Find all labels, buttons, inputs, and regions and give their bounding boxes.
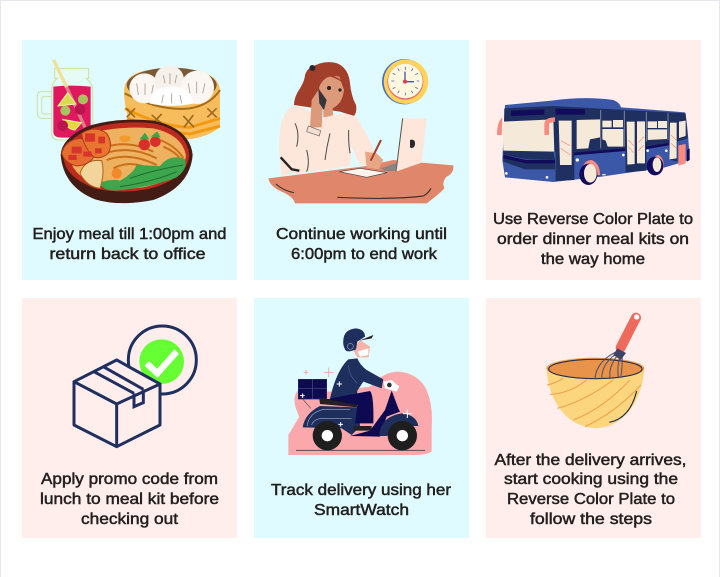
caption: use reverse color plate [493, 211, 693, 268]
caption: start cooking: start cooking using the [504, 471, 678, 488]
caption: continue working: Continue working until [276, 226, 447, 243]
icon: blue bus [497, 98, 690, 185]
panel: apply promo code [22, 298, 237, 538]
icon: masked courier on scooter [288, 328, 432, 455]
caption: track delivery [271, 482, 452, 519]
caption: continue working [276, 226, 447, 263]
caption: continue working: 6:00pm to end work [291, 246, 438, 263]
icon: food with drink, buns and bowl [37, 60, 220, 203]
panel: enjoy meal [22, 40, 237, 280]
panel: start cooking [486, 298, 701, 538]
caption: enjoy meal: return back to office [50, 246, 206, 263]
caption: enjoy meal [32, 226, 226, 263]
caption: apply promo code: checking out [81, 511, 179, 528]
caption: use reverse color plate: order dinner meal kits on [497, 231, 689, 248]
icon: wall clock [382, 59, 428, 104]
panel: reverse color plate on the way home [486, 40, 701, 280]
caption: apply promo code: lunch to meal kit before [40, 491, 219, 508]
caption: start cooking: After the delivery arrives, [494, 452, 686, 469]
caption: start cooking [494, 452, 686, 528]
panel: continue working [254, 40, 469, 280]
icon: mixing bowl with whisk [546, 314, 644, 428]
caption: use reverse color plate: Use Reverse Color Plate to [493, 211, 693, 228]
caption: use reverse color plate: the way home [541, 251, 645, 268]
caption: track delivery: SmartWatch [314, 502, 409, 519]
caption: enjoy meal: Enjoy meal till 1:00pm and [32, 226, 226, 243]
icon: woman on phone at laptop with clock [268, 59, 453, 203]
caption: apply promo code [40, 471, 219, 528]
caption: track delivery: Track delivery using her [271, 482, 452, 499]
caption: start cooking: Reverse Color Plate to [507, 491, 675, 508]
caption: start cooking: follow the steps [530, 511, 652, 528]
icon: box with green check badge [74, 326, 196, 447]
panel: track delivery [254, 298, 469, 538]
caption: apply promo code: Apply promo code from [41, 471, 218, 488]
